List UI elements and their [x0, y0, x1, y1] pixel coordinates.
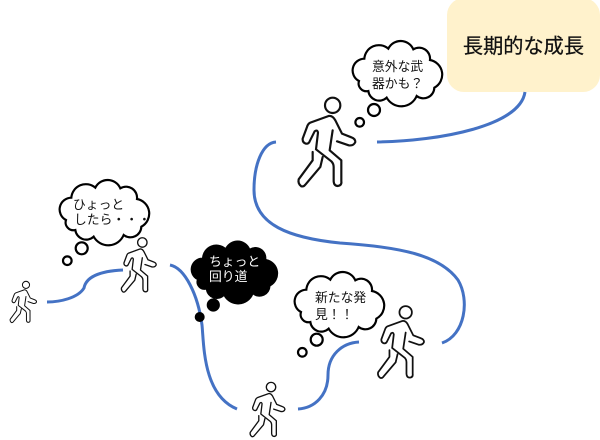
thought bubble: unexpected weapon: 器かも？ [372, 76, 423, 91]
goal box: long-term growth: 長期的な成長 [463, 35, 584, 58]
path segment: long winding middle [254, 142, 464, 343]
thought bubble: small detour: 回り道 [209, 269, 248, 284]
icon: walking person, bottom [250, 382, 285, 437]
icon: walking person, right [378, 306, 424, 378]
thought bubble: new discovery: 新たな発 [315, 290, 366, 305]
thought bubble: maybe: したら・・・ [74, 212, 151, 227]
thought bubble: unexpected weapon [353, 41, 442, 127]
thought bubble: small detour: ちょっと [209, 254, 260, 269]
path segment: detour descent [170, 265, 237, 409]
goal box: long-term growth [447, 0, 600, 92]
path segment: top to goal [377, 92, 525, 142]
thought bubble: maybe: ひょっと [73, 197, 124, 212]
icon: walking person, second [121, 238, 156, 292]
thought bubble: unexpected weapon: 意外な武 [372, 59, 423, 74]
path segment: lower rise [298, 342, 359, 409]
icon: walking person, top [298, 98, 355, 186]
thought bubble: new discovery [295, 272, 384, 357]
thought bubble: small detour [191, 241, 278, 322]
path segment: first step [47, 270, 123, 302]
thought bubble: new discovery: 見！！ [315, 307, 353, 322]
icon: walking person, smallest [10, 281, 37, 323]
thought bubble: maybe [60, 180, 151, 265]
